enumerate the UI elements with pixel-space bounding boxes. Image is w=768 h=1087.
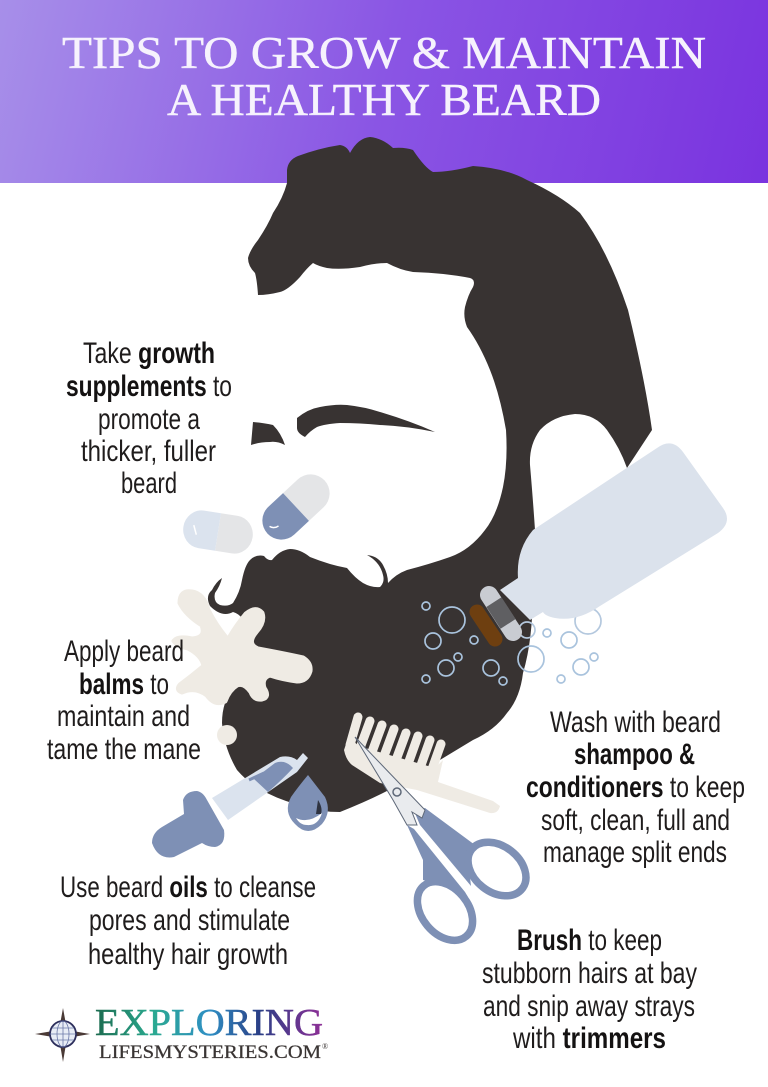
text: growth supplements — [66, 337, 232, 500]
icon: capsule, pale — [180, 508, 256, 556]
text: beard oils: Use beard oils to cleanse — [60, 871, 316, 904]
title: A HEALTHY BEARD — [167, 74, 601, 125]
logo: compass globe — [35, 1008, 90, 1062]
text: brush and trimmers: stubborn hairs at bay — [482, 957, 697, 990]
icon: beard balm splat — [174, 592, 310, 745]
icon: shampoo bubbles behind bottle — [519, 608, 601, 638]
text: balms: maintain and — [57, 700, 190, 733]
text: growth supplements: supplements to — [66, 370, 232, 403]
icon: scissors — [355, 737, 536, 951]
text: beard oils: pores and stimulate — [89, 904, 290, 937]
text: growth supplements: thicker, fuller — [81, 435, 216, 468]
icon: comb — [344, 717, 500, 813]
icon: capsule, blue and grey — [255, 467, 337, 547]
text: brush and trimmers — [482, 924, 697, 1055]
text: brush and trimmers: with trimmers — [512, 1022, 666, 1055]
logo: wordmark: ® — [322, 1042, 328, 1051]
text: growth supplements: Take growth — [83, 337, 215, 370]
text: balms — [47, 635, 201, 766]
icon: oil drop — [288, 775, 328, 831]
icon: shampoo bottle — [477, 443, 727, 639]
text: balms: balms to — [79, 668, 169, 701]
text: balms: Apply beard — [64, 635, 184, 668]
text: growth supplements: beard — [121, 467, 177, 500]
text: shampoo and conditioners — [526, 706, 745, 869]
text: brush and trimmers: and snip away strays — [483, 990, 695, 1023]
header band — [0, 0, 768, 183]
icon: soap bubbles — [422, 602, 598, 685]
text: growth supplements: promote a — [98, 403, 200, 436]
text: brush and trimmers: Brush to keep — [517, 924, 662, 957]
text: shampoo and conditioners: shampoo & — [574, 738, 695, 771]
logo: wordmark: LIFESMYSTERIES.COM — [99, 1043, 321, 1063]
text: balms: tame the mane — [47, 733, 201, 766]
logo: wordmark: EXPLORING — [95, 1002, 323, 1044]
text: beard oils — [60, 871, 316, 971]
text: beard oils: healthy hair growth — [88, 938, 288, 971]
eye — [251, 422, 285, 445]
icon: oil dropper — [152, 753, 308, 857]
beard and hair silhouette — [208, 137, 652, 812]
logo: wordmark — [95, 1002, 328, 1063]
title — [62, 27, 706, 125]
text: shampoo and conditioners: conditioners to keep — [526, 771, 745, 804]
title: TIPS TO GROW & MAINTAIN — [62, 27, 706, 78]
eyebrow — [297, 405, 435, 437]
text: shampoo and conditioners: Wash with beard — [550, 706, 721, 739]
